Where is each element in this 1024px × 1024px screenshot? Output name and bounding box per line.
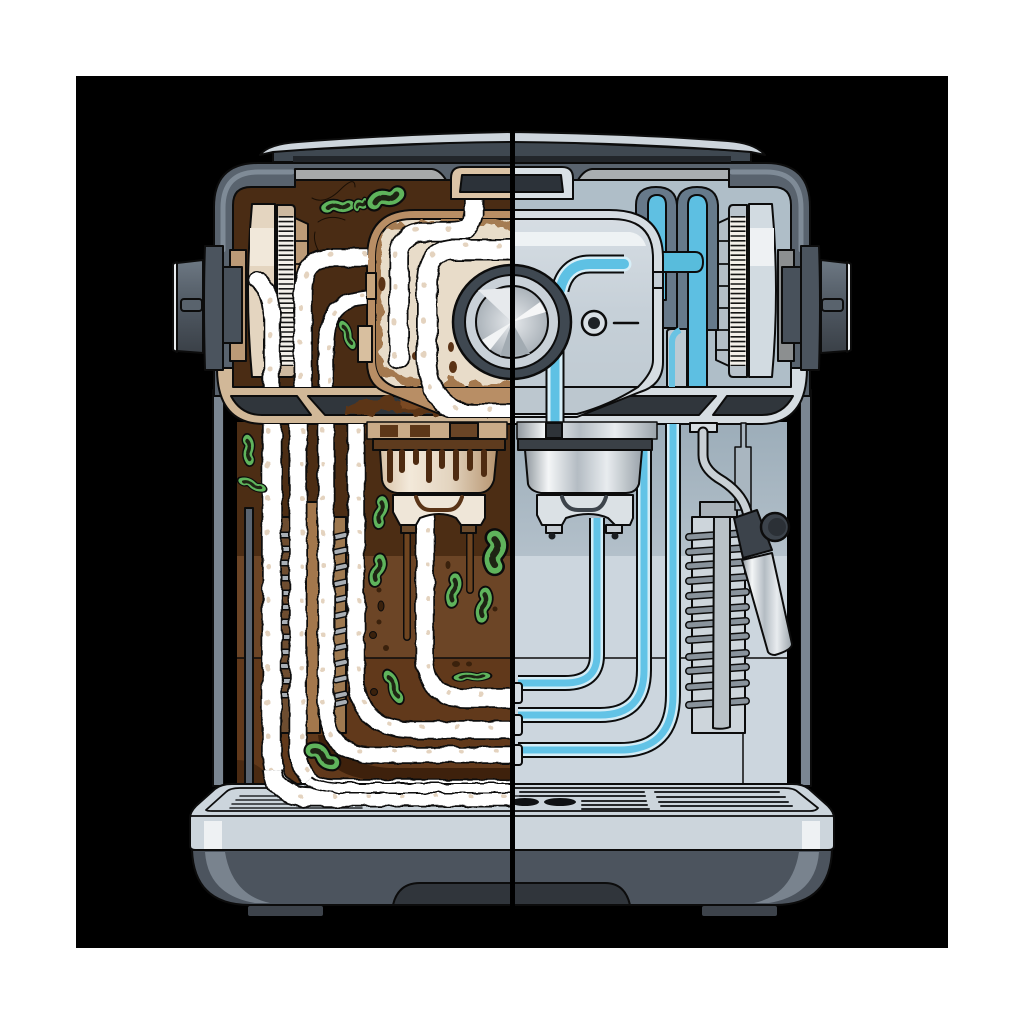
left gear assembly [230,204,308,377]
lower cabinet right: clean [512,395,800,787]
right portafilter, clean [517,422,657,540]
right boiler [512,210,663,417]
coffee drips and spots [370,535,498,696]
right gear assembly [716,204,794,377]
left frame band [217,368,512,424]
machine lid [260,132,765,168]
left boiler [358,210,512,417]
green bacteria colonies [243,182,500,766]
group head [453,265,571,379]
boiler scale deposits [395,195,520,414]
right knob [782,246,851,370]
clean blue pipe in boiler [555,264,624,425]
steam and coil tubes, right [636,187,718,387]
lower cabinet left: dirty [237,422,512,785]
steam wand [690,423,792,655]
lower scale deposits [268,415,520,797]
right frame band [512,368,807,424]
left portafilter with coffee residue [367,422,507,533]
top centre plate [451,167,573,199]
top strips [295,169,729,180]
left knob [173,246,242,370]
left frame stains [345,398,510,414]
scale running over drip tray, left [272,770,520,797]
left vertical rod [245,508,253,793]
right shell [512,163,811,787]
black panel [76,76,948,948]
left interior brown [233,180,512,388]
centre divider [510,130,515,906]
right radiator coil [689,502,746,733]
left shell [213,163,512,787]
right interior grey [512,180,791,388]
scale neck above boiler [464,192,484,218]
left radiator fins [279,502,346,733]
clean blue water lines [512,424,673,765]
upper scale deposits [257,254,368,395]
pressure gauge dot [582,311,638,335]
drip tray [190,784,834,916]
